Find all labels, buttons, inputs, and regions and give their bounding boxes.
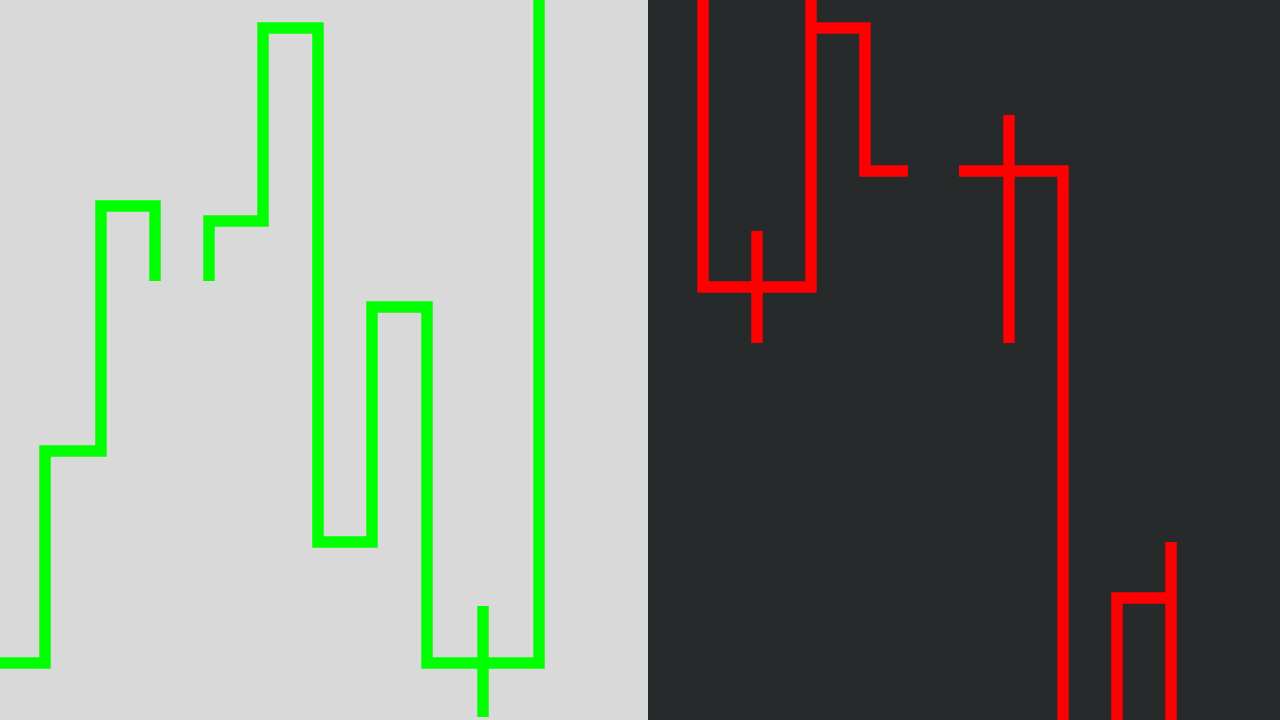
- red tick mark, second: [1003, 115, 1015, 343]
- red step line, long descent: [959, 171, 1063, 720]
- green step line, left segment: [0, 206, 155, 663]
- panel: light left background: [0, 0, 648, 720]
- green step line, main segment: [209, 0, 539, 663]
- red tick mark, first: [751, 231, 763, 343]
- red vertical line, lower right: [1165, 542, 1177, 720]
- red step line, upper segment: [703, 0, 811, 287]
- red step line, lower segment: [1117, 598, 1171, 720]
- green tick mark: [477, 606, 489, 717]
- red step line, shoulder segment: [811, 28, 908, 171]
- panel: dark right background: [648, 0, 1280, 720]
